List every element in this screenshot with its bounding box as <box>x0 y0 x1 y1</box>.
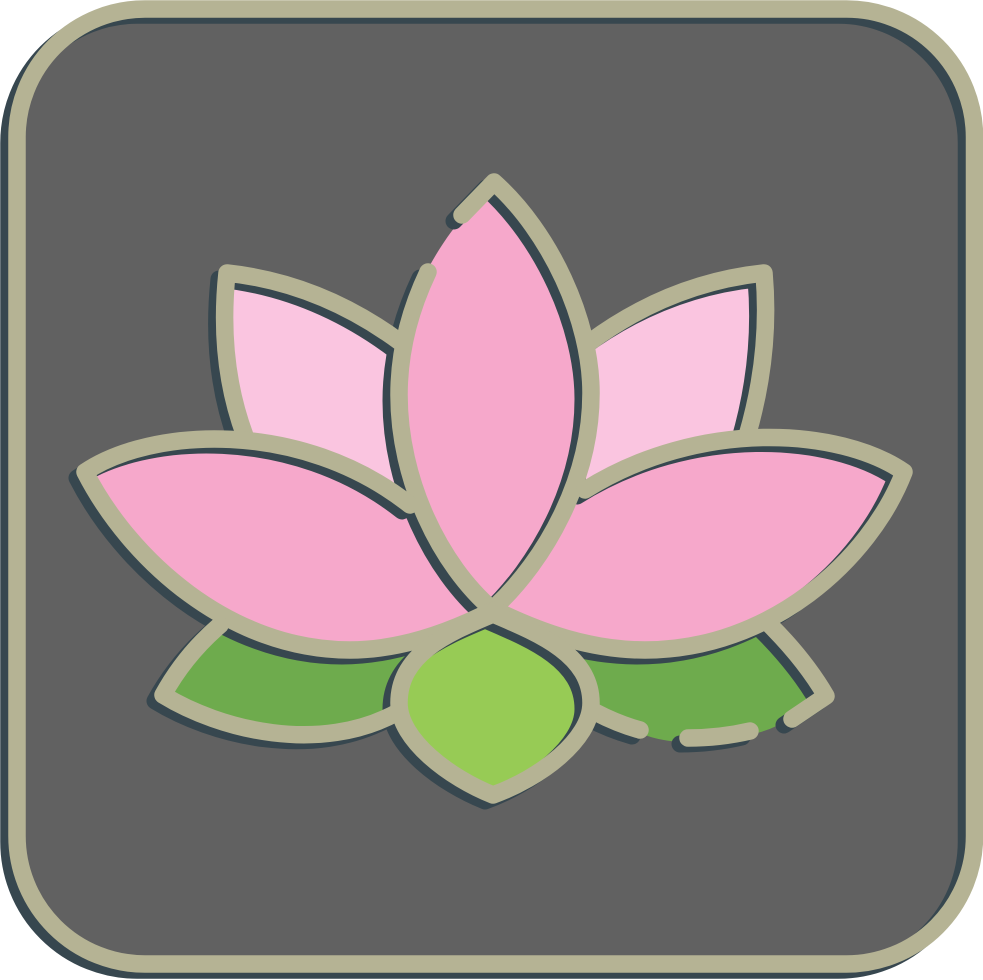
outline: right leaf short dash <box>595 712 640 730</box>
outline: front left petal <box>85 439 493 650</box>
outline: left leaf <box>163 625 398 735</box>
outline: centre bud <box>399 614 591 795</box>
outline: front right petal <box>495 437 904 650</box>
outline: centre petal right side with top stub <box>462 182 591 607</box>
outline: right leaf dash <box>688 731 750 738</box>
outline: centre petal left side <box>399 272 493 610</box>
leaf: left green fill <box>163 628 425 735</box>
outline: tan flower strokes <box>85 182 904 795</box>
petal: back left fill <box>225 273 400 510</box>
outline: back left petal <box>225 273 400 436</box>
outline: back right petal <box>590 273 766 436</box>
petal: back right fill <box>585 273 766 510</box>
petal: front left fill <box>85 439 493 650</box>
petal: centre fill <box>399 186 591 608</box>
leaf: right green fill <box>570 625 815 743</box>
outline: right leaf edge <box>770 625 826 719</box>
shadow: offset dark outline of flower <box>77 188 896 801</box>
bud: centre green fill <box>399 614 591 795</box>
petal: front right fill <box>495 437 904 650</box>
